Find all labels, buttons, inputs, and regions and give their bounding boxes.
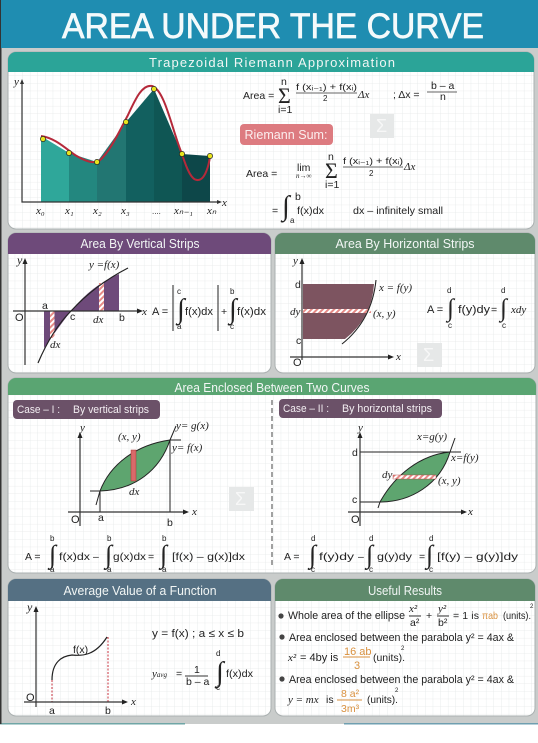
formula: Riemann limit: ∫	[280, 191, 292, 223]
chart: vertical strips: c	[70, 311, 75, 323]
result: ellipse area: b²	[438, 617, 448, 629]
formula: Riemann limit: Σ	[325, 158, 338, 183]
chart: horizontal strips: O	[293, 357, 302, 369]
watermark sigma	[370, 114, 394, 138]
chart: trapezoids under curve	[13, 76, 227, 217]
formula: case II: ∫	[424, 540, 435, 570]
chart: horizontal strips: d	[295, 279, 301, 291]
formula: Riemann limit: 2	[369, 169, 374, 178]
result: parabola and line: is	[326, 694, 334, 706]
formula: average value: y = f(x) ; a ≤ x ≤ b	[152, 628, 244, 640]
chart: vertical strips between curves: b	[167, 517, 173, 529]
panel heading: horizontal strips: Area By Horizontal Strips	[336, 237, 474, 251]
chart: vertical strips: b	[119, 312, 125, 324]
chart: vertical strips between curves	[68, 420, 209, 529]
chart: horizontal strips: x = f(y)	[378, 282, 412, 294]
chart: average value: b	[105, 705, 111, 717]
title: AREA UNDER THE CURVE	[62, 7, 484, 46]
formula: case I: a	[50, 565, 55, 574]
chart: horizontal strips between curves: x=g(y)	[416, 431, 447, 443]
panel heading: trapezoidal	[8, 52, 534, 72]
chart: trapezoids under curve: x	[221, 197, 227, 209]
formula: case II: d	[429, 534, 433, 543]
chart: trapezoids under curve: x₃	[120, 205, 130, 217]
chart: trapezoids under curve: y	[13, 76, 19, 88]
formula: case I: g(x)dx	[113, 551, 147, 563]
formula: Riemann limit	[246, 151, 443, 225]
chart: vertical strips between curves: a	[98, 512, 104, 524]
formula: case I: –	[93, 551, 99, 563]
formula: horizontal strips: ∫	[445, 295, 455, 323]
Riemann sum pill: Riemann Sum:	[244, 127, 328, 142]
divider	[271, 400, 273, 566]
formula: case II: A =	[284, 551, 299, 563]
formula: vertical strips: +	[221, 306, 227, 318]
formula: horizontal strips: d	[447, 286, 451, 295]
formula: area sum: Area =	[243, 90, 274, 102]
panel heading: vertical strips	[8, 233, 271, 254]
formula: vertical strips: c	[177, 287, 181, 296]
chart: trapezoids under curve: ....	[152, 207, 161, 216]
formula: area sum: Σ	[278, 83, 291, 108]
result: ellipse area: πab	[482, 610, 498, 622]
panel: useful results	[275, 579, 535, 716]
Riemann sum pill	[240, 124, 333, 145]
formula: horizontal strips: xdy	[510, 304, 526, 316]
formula: case II: c	[369, 565, 373, 574]
panel: area between two curves	[8, 378, 536, 574]
formula: vertical strips: c	[230, 322, 234, 331]
formula: case II: c	[311, 565, 315, 574]
chart: vertical strips between curves: x	[191, 506, 197, 518]
formula: area sum: b – a	[431, 80, 455, 92]
chart: average value: y	[26, 600, 33, 614]
formula: case I: f(x)dx	[59, 551, 91, 563]
watermark sigma	[229, 487, 254, 511]
formula: average value: ∫	[214, 657, 226, 689]
chart: horizontal strips between curves: x	[467, 506, 473, 518]
formula: Riemann limit: n→∞	[296, 172, 312, 180]
formula: Riemann limit: f (xᵢ₋₁) + f(xᵢ)	[343, 156, 403, 167]
panel: area by horizontal strips	[275, 233, 535, 373]
chart: average value: x	[130, 696, 136, 708]
watermark sigma	[417, 343, 442, 367]
chart: vertical strips: O	[15, 312, 24, 324]
formula: average value: yavg	[151, 668, 167, 680]
case I pill: By vertical strips	[73, 404, 149, 416]
result: ellipse area: (units).	[503, 610, 531, 622]
formula: vertical strips: ∫	[175, 294, 187, 326]
formula: case II: c	[429, 565, 433, 574]
formula: horizontal strips: c	[502, 321, 506, 330]
result: parabola and line: y = mx	[287, 694, 319, 706]
panel: average value of a function	[8, 579, 271, 717]
formula: case I: ∫	[158, 540, 169, 570]
chart: vertical strips: dx	[93, 314, 104, 326]
formula: case II	[284, 534, 519, 574]
formula: Riemann limit: b	[295, 191, 301, 203]
formula: case I: b	[50, 534, 55, 543]
formula: case II: –	[358, 551, 364, 563]
chart: horizontal strips between curves: c	[352, 494, 357, 506]
formula: average value: d	[216, 649, 220, 658]
formula: Riemann limit: a	[290, 216, 295, 225]
chart: vertical strips: x	[141, 306, 147, 318]
formula: Riemann limit: dx – infinitely small	[353, 205, 443, 217]
chart: trapezoids under curve: xₙ	[206, 205, 217, 217]
case II pill: By horizontal strips	[342, 403, 432, 415]
panel heading: horizontal strips	[275, 233, 535, 254]
formula: case I: b	[162, 534, 167, 543]
formula: area sum: f (xᵢ₋₁) + f(xᵢ)	[296, 82, 357, 93]
formula: case II: [f(y) – g(y)]dy	[437, 551, 519, 563]
chart: horizontal strips between curves: (x, y)	[438, 475, 461, 487]
formula: average value: c	[216, 683, 220, 692]
formula: case I: a	[107, 565, 112, 574]
formula: average value: f(x)dx	[226, 668, 254, 680]
formula: case I: ∫	[103, 540, 114, 570]
chart: horizontal strips: dy	[290, 306, 300, 318]
chart: horizontal strips between curves: y	[357, 422, 363, 434]
chart: horizontal strips: y	[292, 255, 298, 267]
result: parabola and line	[279, 674, 515, 715]
chart: trapezoids under curve: x₁	[64, 205, 74, 217]
result: parabola and parabola: = 4by is	[300, 652, 339, 664]
chart: vertical strips between curves: y= g(x)	[175, 420, 209, 432]
formula: Riemann limit: i=1	[325, 179, 339, 191]
chart: horizontal strips: x	[395, 351, 401, 363]
watermark sigma: Σ	[423, 345, 434, 365]
formula: area sum	[243, 76, 457, 116]
chart: horizontal strips between curves: dy	[382, 469, 392, 481]
chart: trapezoids under curve: xₙ₋₁	[173, 205, 193, 217]
formula: Riemann limit: n	[328, 151, 334, 163]
chart: vertical strips between curves: y= f(x)	[171, 442, 203, 454]
panel heading: trapezoidal: Trapezoidal Riemann Approximation	[149, 55, 395, 70]
formula: vertical strips: b	[230, 287, 235, 296]
result: parabola and parabola: x²	[287, 652, 297, 664]
formula: horizontal strips: f(y)dy	[458, 304, 491, 316]
formula: case I: [f(x) – g(x)]dx	[172, 551, 246, 563]
chart: horizontal strips: c	[296, 335, 301, 347]
result: parabola and line: 8 a²	[341, 688, 360, 700]
formula: area sum: 2	[323, 94, 328, 103]
chart: vertical strips: a	[42, 300, 48, 312]
formula: case II: =	[419, 551, 425, 563]
formula: area sum: Δx	[357, 89, 369, 101]
result: ellipse area: Whole area of the ellipse	[288, 610, 405, 622]
formula: case II: d	[311, 534, 315, 543]
result: parabola and line: 3m³	[341, 703, 360, 715]
watermark sigma: Σ	[235, 489, 246, 509]
panel heading: vertical strips: Area By Vertical Strips	[80, 237, 200, 251]
result: parabola and line: 2	[395, 688, 399, 694]
result: ellipse area: x²	[408, 603, 418, 615]
result: ellipse area: 2	[530, 604, 534, 610]
result: ellipse area: = 1 is	[453, 610, 479, 622]
formula: area sum: n	[281, 76, 287, 88]
chart: trapezoids under curve: x₂	[92, 205, 102, 217]
chart: vertical strips between curves: O	[71, 514, 80, 526]
formula: case I	[25, 534, 246, 574]
formula: horizontal strips: ∫	[498, 295, 508, 323]
formula: vertical strips	[152, 285, 267, 331]
formula: case II: g(y)dy	[377, 551, 413, 563]
result: parabola and line: Area enclosed between the parabola y² = 4ax &	[289, 674, 515, 686]
panel heading: average value: Average Value of a Function	[64, 583, 216, 598]
chart: horizontal strips between curves: d	[352, 447, 358, 459]
case I pill: Case – I :	[17, 404, 60, 416]
formula: average value: =	[176, 668, 182, 680]
formula: average value	[151, 628, 254, 692]
panel heading: useful results: Useful Results	[368, 583, 442, 598]
chart: average value: f(x)	[73, 644, 88, 656]
chart: vertical strips between curves: (x, y)	[118, 431, 141, 443]
formula: Riemann limit: =	[272, 205, 278, 217]
result: ellipse area: y²	[437, 603, 447, 615]
chart: average value	[24, 600, 136, 717]
case II pill: Case – II :	[283, 403, 329, 415]
panel heading: two curves	[8, 378, 536, 395]
formula: case I: A =	[25, 551, 40, 563]
result: ellipse area	[278, 603, 534, 629]
formula: horizontal strips: d	[501, 286, 505, 295]
chart: trapezoids under curve: x₀	[35, 205, 45, 217]
result: parabola and parabola	[279, 632, 515, 672]
result: parabola and parabola: Area enclosed between the parabola y² = 4ax &	[289, 632, 515, 644]
title	[1, 0, 538, 48]
panel heading: average value	[8, 579, 271, 601]
panel heading: two curves: Area Enclosed Between Two Curves	[174, 381, 370, 395]
chart: horizontal strips between curves: O	[351, 514, 360, 526]
formula: area sum: i=1	[278, 104, 292, 116]
result: parabola and line: (units).	[367, 694, 398, 706]
watermark sigma: Σ	[376, 116, 387, 136]
formula: average value: 1	[194, 664, 200, 676]
case I pill	[13, 400, 160, 419]
panel: trapezoidal Riemann approximation	[8, 52, 534, 229]
result: ellipse area: a²	[410, 617, 420, 629]
formula: vertical strips: f(x)dx	[237, 306, 267, 318]
chart: horizontal strips: (x, y)	[373, 308, 396, 320]
formula: horizontal strips: =	[491, 304, 497, 316]
formula: area sum: ; Δx =	[393, 89, 420, 101]
chart: vertical strips	[13, 253, 147, 365]
chart: vertical strips: y =f(x)	[88, 259, 120, 271]
result: parabola and parabola: 16 ab	[344, 646, 372, 658]
formula: vertical strips: ∫	[227, 294, 239, 326]
formula: case I: b	[107, 534, 112, 543]
formula: vertical strips: a	[177, 322, 182, 331]
formula: case I: =	[148, 551, 154, 563]
chart: vertical strips between curves: y	[79, 422, 85, 434]
chart: average value: O	[26, 692, 35, 704]
case II pill	[279, 399, 442, 418]
result: ellipse area: +	[426, 610, 432, 622]
panel: area by vertical strips	[8, 233, 271, 373]
chart: horizontal strips between curves	[348, 422, 479, 526]
formula: case I: ∫	[47, 540, 58, 570]
chart: horizontal strips	[290, 255, 412, 369]
formula: Riemann limit: lim	[297, 162, 311, 174]
formula: Riemann limit: Δx	[403, 161, 415, 173]
formula: case II: d	[369, 534, 373, 543]
formula: vertical strips: A =	[152, 306, 168, 318]
formula: horizontal strips: c	[448, 321, 452, 330]
formula: vertical strips: f(x)dx	[185, 306, 214, 318]
chart: average value: a	[49, 705, 55, 717]
result: parabola and parabola: 3	[354, 660, 360, 672]
result: parabola and parabola: (units).	[373, 652, 405, 664]
formula: case I: a	[162, 565, 167, 574]
chart: vertical strips: y	[16, 253, 23, 267]
chart: horizontal strips between curves: x=f(y)	[450, 452, 479, 464]
chart: vertical strips between curves: dx	[129, 486, 140, 498]
formula: area sum: n	[440, 91, 446, 103]
formula: Riemann limit: Area =	[246, 168, 277, 180]
result: parabola and parabola: 2	[401, 646, 405, 652]
formula: average value: b – a	[186, 676, 210, 688]
panel heading: useful results	[275, 579, 535, 601]
formula: Riemann limit: f(x)dx	[297, 205, 325, 217]
formula: case II: ∫	[307, 540, 318, 570]
formula: horizontal strips	[427, 286, 526, 330]
formula: case II: f(y)dy	[319, 551, 355, 563]
chart: vertical strips: dx	[50, 339, 60, 351]
formula: case II: ∫	[364, 540, 375, 570]
formula: horizontal strips: A =	[427, 304, 443, 316]
